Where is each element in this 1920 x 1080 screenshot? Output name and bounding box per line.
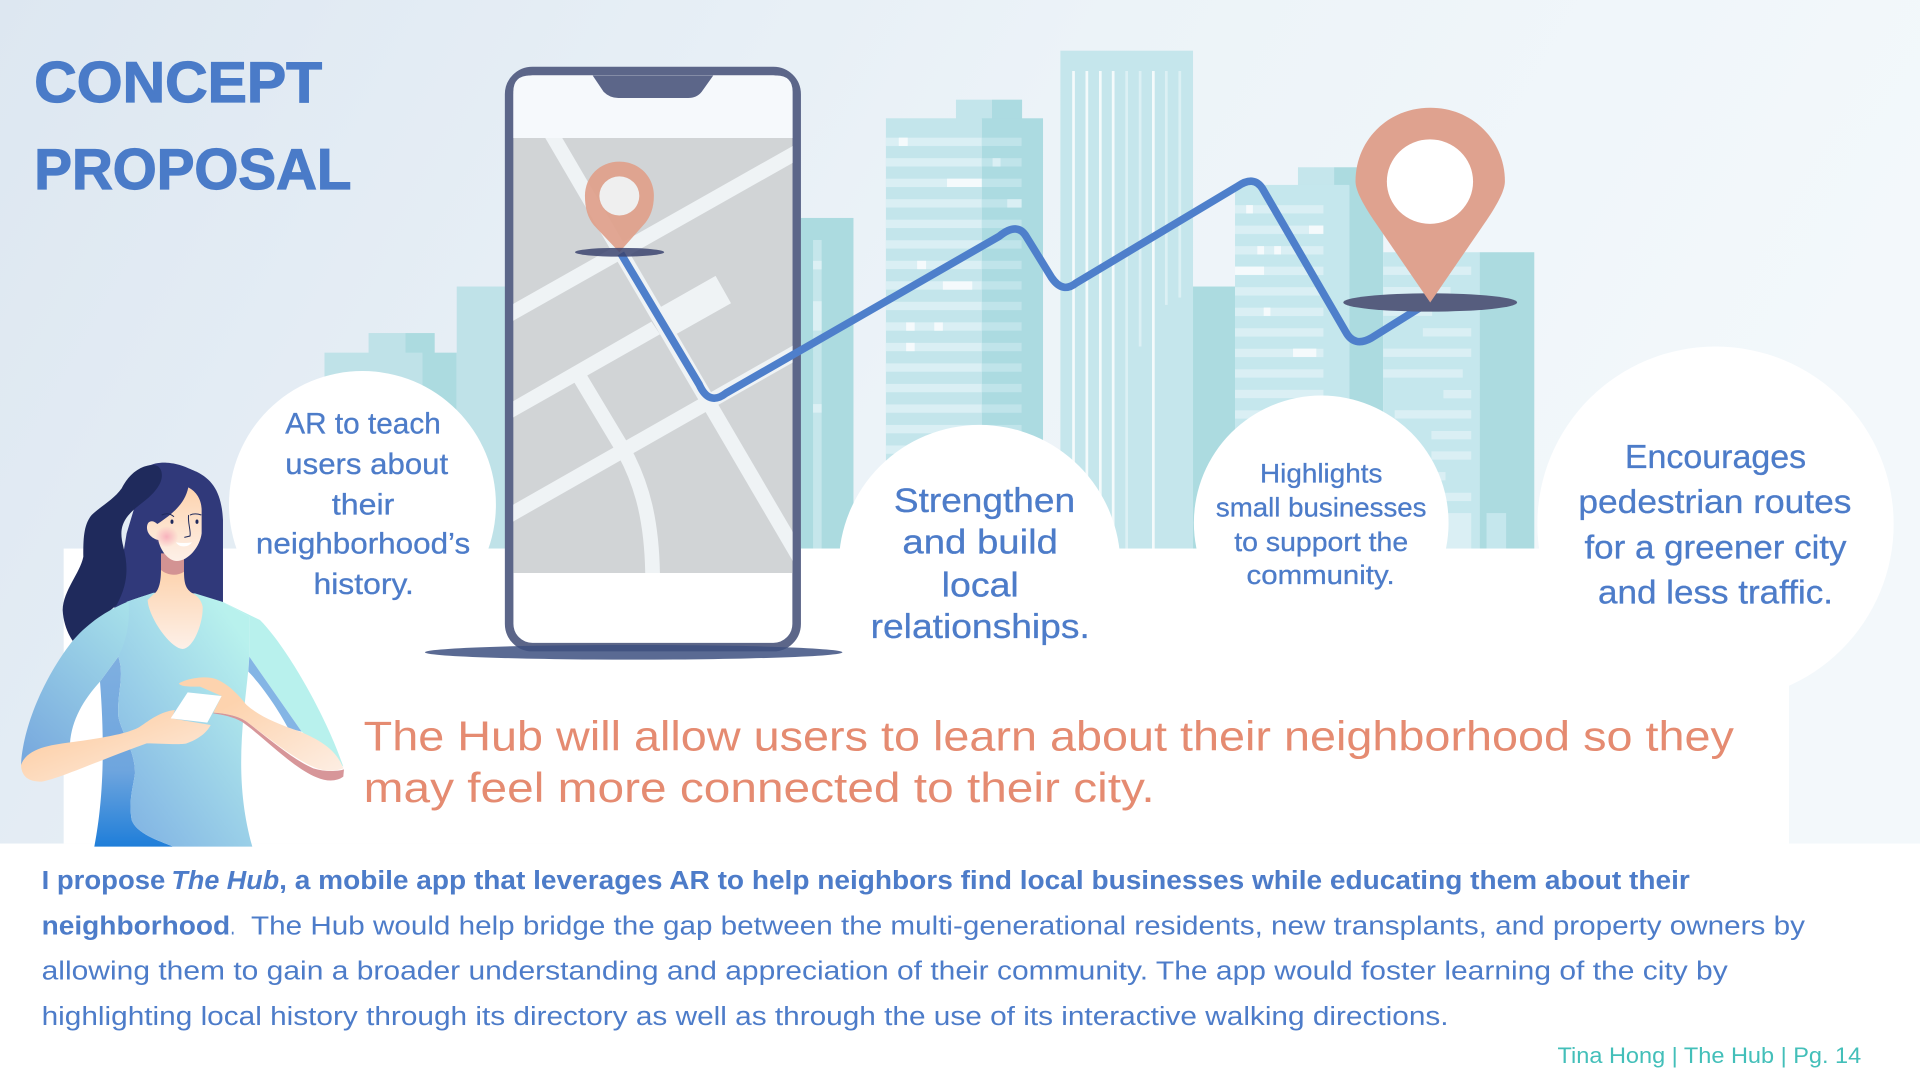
phone notch [593, 76, 713, 98]
facial features [162, 514, 201, 537]
mouth [176, 542, 192, 546]
bubble text: AR history: history. [313, 568, 414, 601]
building: tower D [1383, 252, 1534, 549]
bubble: small businesses [1194, 396, 1449, 650]
title: PROPOSAL [34, 138, 351, 202]
phone card in hand [171, 692, 222, 723]
headline statement: may feel more connected to their city. [364, 764, 1155, 811]
bubble text: AR history: AR to teach [285, 407, 441, 440]
title: CONCEPT [34, 51, 322, 115]
bubble text: AR history [256, 407, 470, 601]
phone body [509, 71, 797, 647]
bubble: relationships [839, 425, 1120, 707]
bubble text: AR history: neighborhood’s [256, 527, 470, 560]
map [513, 138, 793, 573]
body paragraph [42, 865, 1806, 1031]
phone top bar [513, 76, 793, 138]
bubble text: relationships: relationships. [871, 608, 1090, 646]
left arm [21, 710, 211, 782]
woman illustration [21, 463, 344, 847]
body paragraph: . [230, 910, 235, 940]
bubble text: pedestrian routes: Encourages [1625, 439, 1806, 476]
footer credit: Tina Hong | The Hub | Pg. 14 [1558, 1043, 1861, 1068]
bubble: pedestrian routes [1537, 347, 1894, 702]
bubble text: small businesses: community. [1247, 560, 1395, 590]
hair front [113, 463, 223, 613]
building: low block [1193, 287, 1235, 549]
body paragraph: neighborhood [42, 910, 230, 940]
bubble text: relationships: Strengthen [894, 482, 1075, 520]
location pin: small [585, 162, 654, 252]
headline statement: The Hub will allow users to learn about their neighborhood so they [364, 713, 1734, 760]
title [34, 51, 351, 202]
white lower band [0, 844, 1920, 1080]
shirt sleeve left [21, 593, 153, 765]
building: far left [324, 287, 506, 549]
walking route [621, 181, 1430, 398]
shirt torso [118, 593, 252, 847]
sleeve inner shade [248, 657, 302, 732]
face [147, 487, 202, 561]
bubble text: AR history: their [332, 488, 395, 521]
body paragraph: I propose [42, 865, 165, 895]
city skyline [324, 51, 1534, 549]
bubble text: AR history: users about [285, 448, 448, 481]
bubble text: small businesses [1216, 458, 1427, 590]
building: striped tower A [886, 100, 1043, 549]
body paragraph: , a mobile app that leverages AR to help neighbors find local businesses while educating them about their [279, 865, 1690, 895]
bubble text: relationships [871, 482, 1090, 646]
location pin hole: small [599, 176, 639, 216]
bubble text: pedestrian routes: for a greener city [1584, 529, 1847, 566]
bubble: AR history [229, 371, 496, 638]
pin hole [1387, 139, 1473, 224]
neck shadow [161, 553, 184, 575]
headline statement [364, 713, 1734, 811]
bubble text: pedestrian routes [1578, 439, 1851, 612]
building: tower C [1235, 167, 1383, 549]
bubble text: pedestrian routes: and less traffic. [1598, 575, 1833, 612]
body paragraph: highlighting local history through its directory as well as through the use of its interactive walking directions. [42, 1001, 1449, 1031]
neck and chest [148, 570, 203, 649]
bubble text: pedestrian routes: pedestrian routes [1578, 484, 1851, 521]
shirt sleeve right [223, 602, 343, 767]
bubble text: small businesses: to support the [1234, 527, 1408, 557]
bubble text: small businesses: Highlights [1260, 458, 1382, 488]
arm shadow [213, 713, 344, 781]
hair dark lobe [63, 465, 162, 642]
background [0, 0, 1920, 844]
pin shadow [1343, 293, 1517, 312]
location pin: large [1343, 108, 1517, 312]
body paragraph: The Hub [171, 865, 279, 895]
body paragraph: The Hub would help bridge the gap between the multi-generational residents, new transplants, and property owners by [251, 910, 1806, 940]
phone shadow [425, 645, 842, 660]
white ground panel [64, 549, 1789, 844]
bubble text: small businesses: small businesses [1216, 493, 1427, 523]
phone [496, 71, 808, 647]
blush [155, 526, 178, 547]
building: behind phone right [801, 218, 853, 549]
bubble text: relationships: local [942, 566, 1019, 604]
bubble text: relationships: and build [902, 523, 1058, 561]
small pin shadow [575, 248, 664, 257]
pin body [1356, 108, 1505, 302]
building: tall tower with vertical lines [1060, 51, 1193, 549]
right arm [179, 677, 343, 771]
shirt shade left [94, 657, 173, 847]
body paragraph: allowing them to gain a broader understanding and appreciation of their community. The app would foster learning of the city by [42, 956, 1729, 986]
